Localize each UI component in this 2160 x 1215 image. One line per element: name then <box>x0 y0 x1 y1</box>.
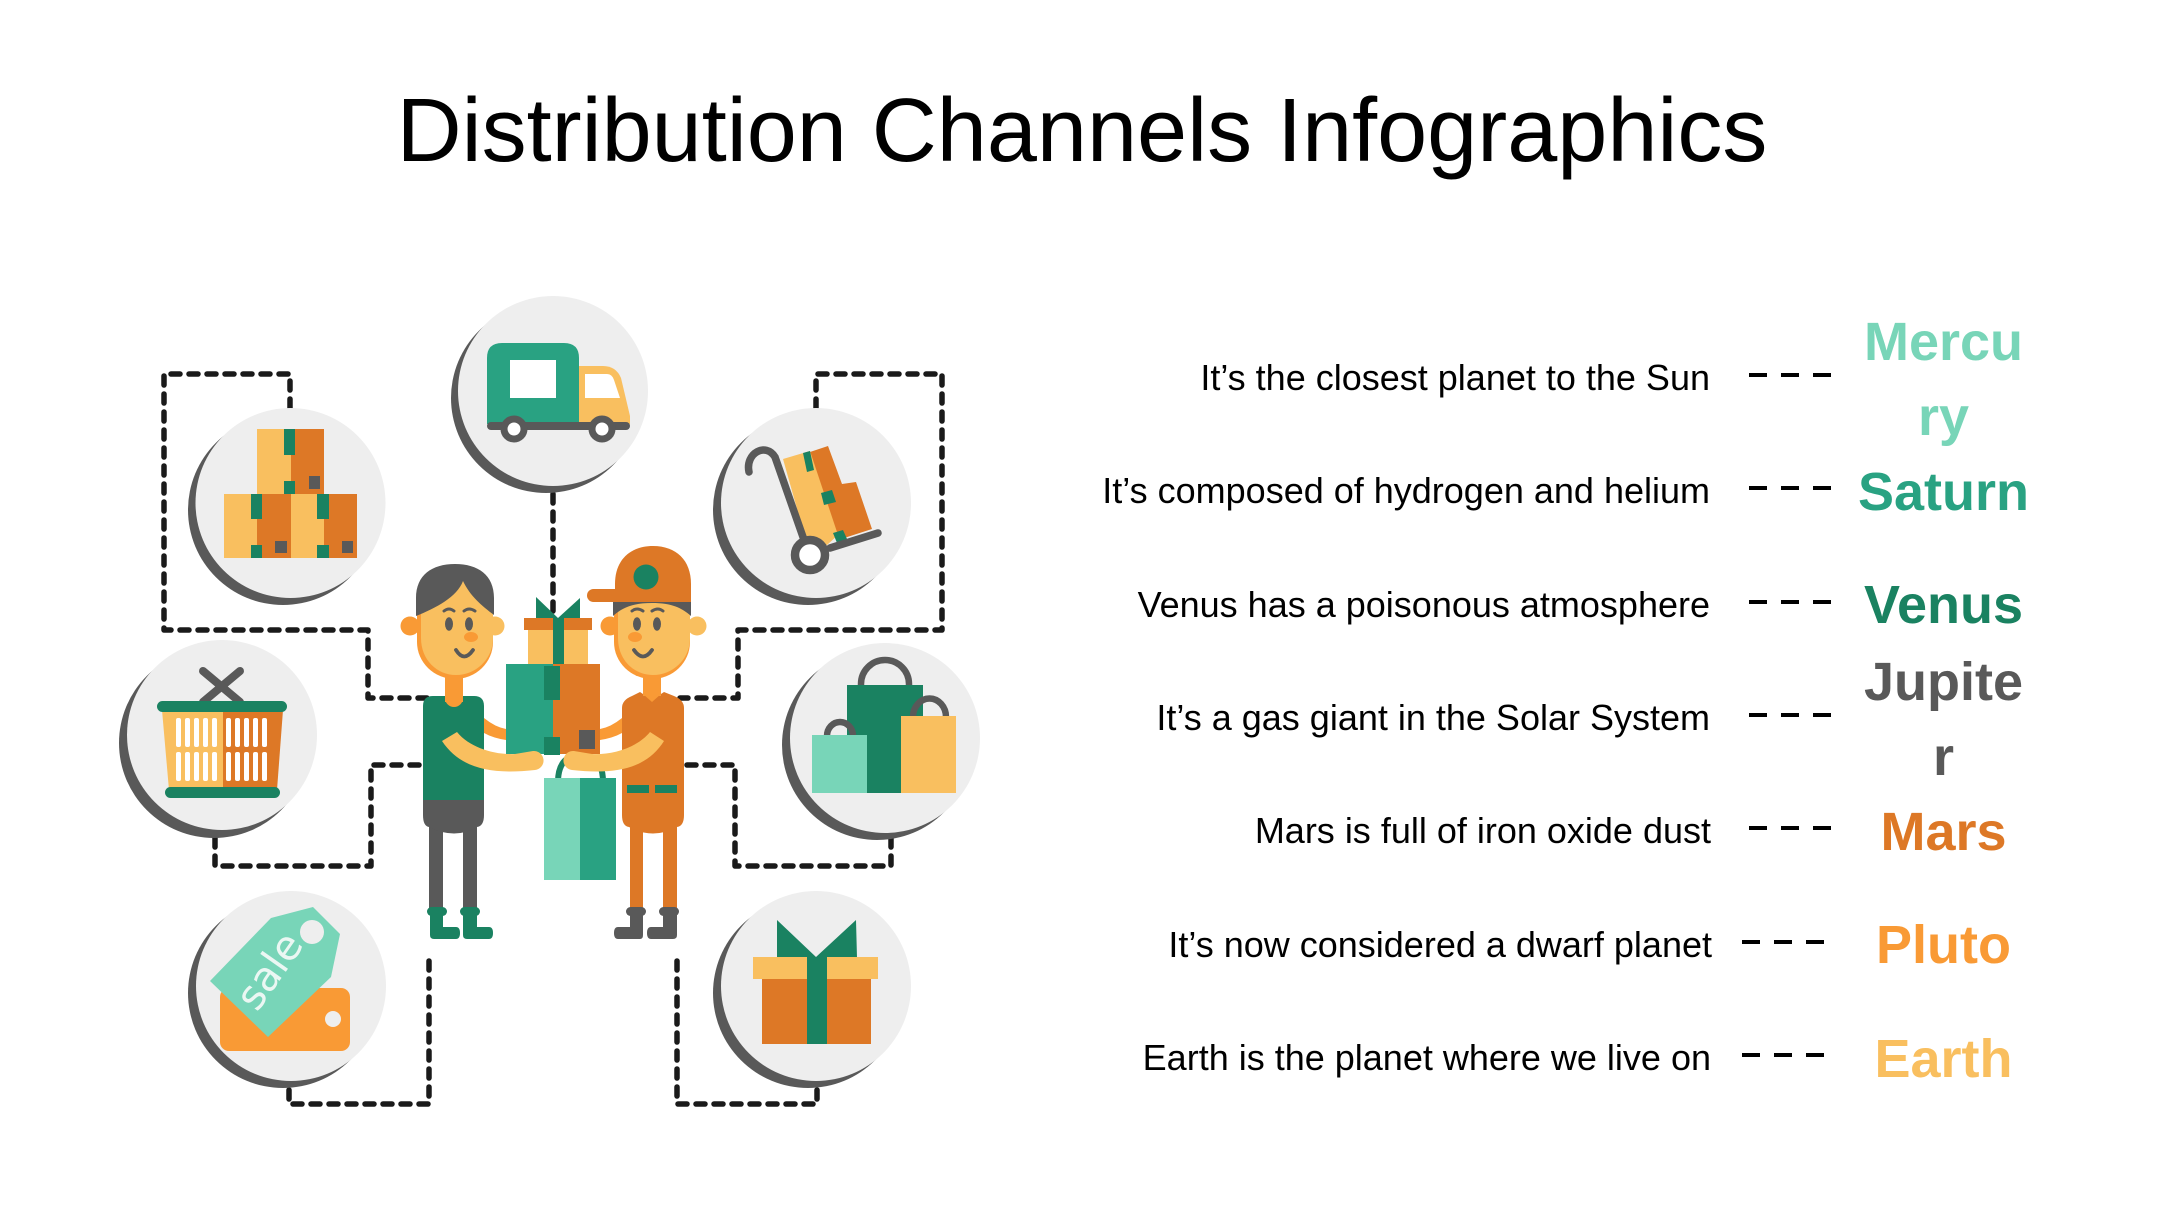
row: Saturn: It’s composed of hydrogen and helium <box>1102 470 1710 511</box>
icon: delivery truck in circle <box>451 296 648 493</box>
row: Saturn <box>1102 462 2029 522</box>
row: Mercury <box>1200 312 2023 447</box>
row: Jupiter: It’s a gas giant in the Solar System <box>1156 697 1710 738</box>
row: Venus <box>1138 575 2023 635</box>
icon: sale tag in circle <box>188 891 386 1088</box>
row: Earth: Earth is the planet where we live on <box>1143 1037 1711 1078</box>
row: Mars: Mars is full of iron oxide dust <box>1255 810 1711 851</box>
row: Saturn: Saturn <box>1858 462 2029 522</box>
row: Pluto: It’s now considered a dwarf planet <box>1168 924 1712 965</box>
row: Venus: Venus has a poisonous atmosphere <box>1138 584 1710 625</box>
row: Jupiter: r <box>1933 727 1954 787</box>
row: Mercury: Mercu <box>1864 312 2023 372</box>
row: Venus: Venus <box>1864 575 2023 635</box>
icon: gift box in circle <box>713 891 911 1088</box>
row: Jupiter: Jupite <box>1864 652 2023 712</box>
row: Jupiter <box>1156 652 2023 787</box>
icon: shopping basket in circle <box>119 640 317 838</box>
row: Mars <box>1255 802 2007 862</box>
title: Distribution Channels Infographics <box>397 81 1767 181</box>
icon: boxes in circle <box>188 408 386 605</box>
row: Pluto <box>1168 915 2011 975</box>
dashed connectors <box>164 374 942 1104</box>
icon: hand trolley in circle <box>713 408 911 605</box>
person: courier in orange uniform <box>563 546 706 939</box>
row: Earth: Earth <box>1874 1029 2013 1089</box>
row: Mercury: ry <box>1918 387 1969 447</box>
stacked parcels <box>506 597 600 755</box>
icon: shopping bags in circle <box>782 643 980 840</box>
row: Earth <box>1143 1029 2013 1089</box>
icon: sale tag in circle: sale <box>226 923 313 1019</box>
shopping bag held by the two people <box>544 758 616 880</box>
person: customer in green shirt <box>400 564 544 939</box>
row: Mercury: It’s the closest planet to the Sun <box>1200 357 1710 398</box>
row: Pluto: Pluto <box>1876 915 2011 975</box>
row: Mars: Mars <box>1880 802 2007 862</box>
